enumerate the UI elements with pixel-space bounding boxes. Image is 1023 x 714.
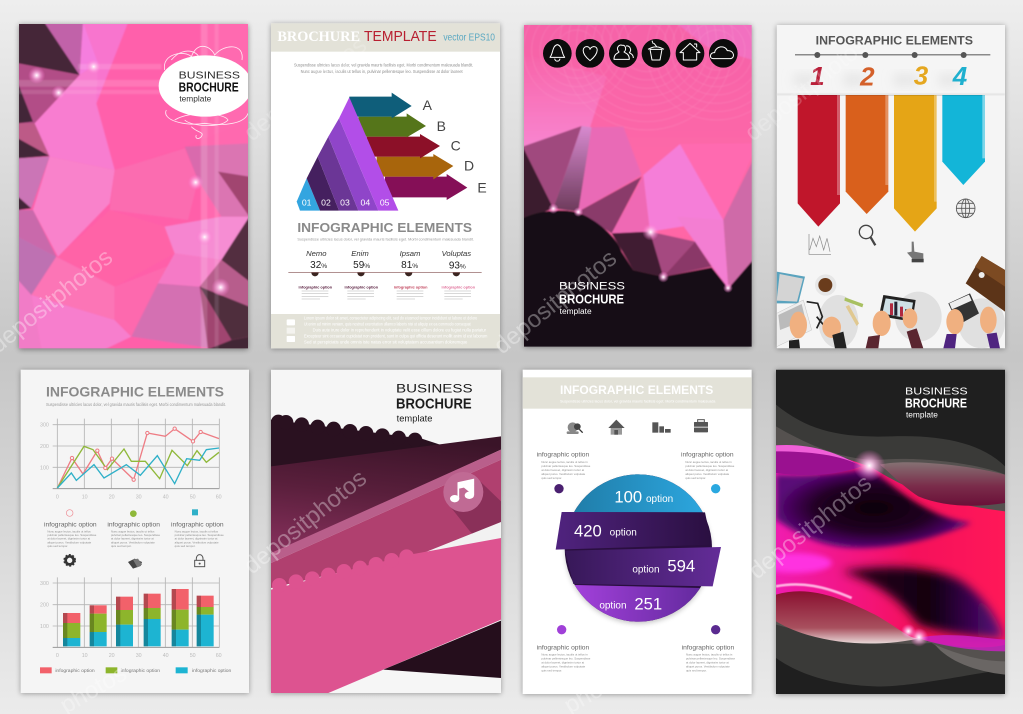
option dots [554,484,720,634]
option text top right: infographic option [681,452,734,459]
icon: magnifier [859,225,875,245]
legend options: Nunc augue lectus, iaculis ut tellus [47,529,91,533]
option text top right: aliquet purus. Vestibulum vulputate [685,472,730,476]
header band [271,23,500,52]
bar chart: 100 [40,624,49,630]
option text bottom left: at dolor laoreet, dignissim tortor at [541,661,584,665]
segmented circle: 420 [574,522,602,541]
watermarks: depositphotos [239,465,372,580]
icon: briefcase [694,420,708,432]
number shadows [797,75,954,85]
title oval: template [179,93,212,103]
option captions [299,285,476,299]
option text bottom right [682,644,735,673]
percentage timeline: 81% [401,260,418,271]
header band: TEMPLATE [364,29,437,45]
percentage timeline: Enim [351,249,369,258]
option text top left: Nunc augue lectus, iaculis ut tellus in [541,460,588,464]
option captions: infographic option [345,285,379,289]
option text top right: at dolor laoreet, dignissim tortor at [685,468,728,472]
percentage timeline: Voluptas [442,249,471,258]
header band: INFOGRAPHIC ELEMENTS [560,383,713,397]
watermarks: depositphotos [740,32,873,147]
heading: Suspendisse ultricies lacus dolor, vel gravida mauris facilisis eget. Morbi condimentum malesuada blandit. [46,402,226,407]
bar chart: 10 [82,653,88,659]
desk illustration [777,256,1005,348]
legend options: infographic option [44,521,97,528]
legend options [44,509,224,548]
option text top right [681,452,735,480]
ribbon numbers: 3 [914,60,929,90]
panel: circular option infographic [523,370,752,695]
heading: INFOGRAPHIC ELEMENTS [46,383,224,399]
line chart: 40 [163,495,169,501]
option text bottom left: pulvinar pellentesque leo. Suspendisse [541,657,591,661]
cover title: BUSINESS [905,387,968,398]
line chart: 30 [136,495,142,501]
ribbons [777,93,1005,232]
legend options: pulvinar pellentesque leo. Suspendisse [175,533,224,537]
header band: vector EPS10 [443,33,495,44]
option text top right: Nunc augue lectus, iaculis ut tellus in [685,460,732,464]
option captions: infographic option [394,285,428,289]
icon: handshake [128,559,142,569]
heading: Suspendisse ultricies lacus dolor, vel gravida mauris facilisis eget. Morbi condimentum malesuada blandit. [297,236,474,241]
icon: line chart [809,234,831,254]
line chart: 10 [82,495,88,501]
intro text [294,62,473,74]
option text top right: pulvinar pellentesque leo. Suspendisse [685,464,735,468]
heading [46,383,226,407]
light glows [548,203,733,293]
legend options: aliquet purus. Vestibulum vulputate [175,540,219,544]
line chart: 200 [40,444,49,450]
scalloped dark band [271,415,440,468]
line chart: 300 [40,423,49,429]
legend options: at dolor laoreet, dignissim tortor at [175,537,218,541]
option text top left [537,452,591,480]
heading [297,221,474,241]
line chart: 50 [190,495,196,501]
percentage timeline: Ipsam [400,249,421,258]
segmented circle: 251 [634,595,662,614]
panel: dark wave brochure cover [758,370,1005,695]
icon: pointing hand [907,242,924,262]
legend options: aliquet purus. Vestibulum vulputate [111,540,155,544]
watermarks: depositphotos [744,470,877,585]
option text top left: infographic option [537,452,590,459]
watermarks: depositphotos [239,32,372,147]
cover title: template [560,306,592,316]
option text top left: aliquet purus. Vestibulum vulputate [541,472,586,476]
legend options: pulvinar pellentesque leo. Suspendisse [47,533,97,537]
light glows [28,59,230,297]
legend options: at dolor laoreet, dignissim tortor at [47,537,90,541]
legend options: aliquet purus. Vestibulum vulputate [47,540,92,544]
segmented circle [556,473,721,623]
long shadow [452,482,501,534]
segmented circle: option [610,528,637,539]
header band: Suspendisse ultricies lacus dolor, vel gravida mauris facilisis eget. Morbi condimentum malesuada [560,399,716,404]
option text top right: quis sed tempor. [685,476,706,480]
panel: flat pink brochure cover [271,370,501,694]
icon row [543,39,738,68]
option text bottom left: infographic option [537,644,590,651]
pyramid: 01 [302,197,312,207]
option text bottom right: aliquet purus. Vestibulum vulputate [686,665,730,669]
pyramid [297,97,398,211]
arrow letters [423,97,487,196]
legend options: Nunc augue lectus, iaculis ut tellus [175,529,219,533]
option text bottom left: quis sed tempor. [541,669,562,673]
legend options: quis sed tempor. [47,544,68,548]
percentage timeline: Nemo [306,249,327,258]
arrow letters: B [437,118,446,134]
bar chart: 60 [216,653,222,659]
panel: ribbon infographic [777,25,1005,349]
footer band: Excepteur sint occaecat cupidatat non proident, sunt in culpa qui officia deserunt mollit anim id est laborum [304,334,488,339]
option text bottom right: at dolor laoreet, dignissim tortor at [686,661,729,665]
option text top left: quis sed tempor. [541,476,562,480]
percentage timeline: 32% [310,260,327,271]
header band [523,377,752,409]
scribble ornament [164,46,248,138]
cover title: BROCHURE [559,292,624,306]
legend options: infographic option [107,521,160,528]
bar chart [40,577,222,659]
option text bottom right: Nunc augue lectus, iaculis ut tellus in [686,653,733,657]
option text bottom left: Nunc augue lectus, iaculis ut tellus in [541,653,588,657]
ribbon numbers: 1 [810,61,825,91]
legend options: at dolor laoreet, dignissim tortor at [111,537,154,541]
option text bottom left: aliquet purus. Vestibulum vulputate [541,665,586,669]
option captions: infographic option [442,285,476,289]
icon: padlock [195,555,205,567]
footer band: Ut enim ad minim veniam, quis nostrud exercitation ullamco laboris nisi ut aliquip ex ea commodo consequat [304,322,471,327]
cover title [396,382,473,423]
intro text: Nunc augue lectus, iaculis ut tellus in, pulvinar pellentesque leo. Suspendisse at dolor laoreet [301,69,463,74]
percentage timeline: 59% [353,260,370,271]
arrow letters: C [451,138,461,154]
legend options: pulvinar pellentesque leo. Suspendisse [111,533,160,537]
cover title: BROCHURE [396,397,472,413]
arrow letters: A [423,97,433,113]
cover title: BUSINESS [396,382,473,396]
line chart: 100 [40,465,49,471]
segmented circle: option [646,494,673,505]
option text bottom right: pulvinar pellentesque leo. Suspendisse [686,657,735,661]
cover title: template [397,413,432,423]
bar legend [40,667,232,674]
legend options: quis sed tempor. [111,544,132,548]
segmented circle: 594 [667,557,695,576]
panel: line and bar charts [21,370,249,694]
option text bottom right: infographic option [682,644,735,651]
line pattern [524,25,752,117]
bar chart: 0 [56,653,59,659]
legend options: quis sed tempor. [175,544,196,548]
header band: BROCHURE [277,29,360,45]
option text bottom right: quis sed tempor. [686,669,707,673]
footer band: Sed ut perspiciatis unde omnis iste natus error sit voluptatem accusantium doloremque [304,339,468,344]
panel: pink and black cover with icons [520,22,755,350]
bar legend: infographic option [121,668,160,674]
icon: people search [567,422,583,434]
icon: bars [652,422,671,433]
line chart: 60 [216,495,222,501]
cover title [905,387,968,420]
line chart: 20 [109,495,115,501]
ribbon numbers: 2 [859,62,875,92]
bar chart: 20 [109,653,115,659]
percentage timeline: 93% [449,261,466,272]
bar chart: 300 [40,581,49,587]
segmented circle: option [599,601,627,612]
arrow letters: E [477,180,487,196]
bar chart: 50 [190,653,196,659]
legend options: Nunc augue lectus, iaculis ut tellus [111,529,155,533]
bar chart: 200 [40,603,49,609]
title oval: BUSINESS [179,71,240,82]
bar chart: 30 [136,653,142,659]
icon: gear [64,555,75,566]
option captions: infographic option [299,285,333,289]
cover title: BROCHURE [905,396,967,410]
title oval: BROCHURE [179,80,239,94]
ribbon numbers [810,66,967,86]
heading: INFOGRAPHIC ELEMENTS [816,33,973,47]
panel: pink polygon brochure cover [18,23,252,350]
panel: pyramid infographic [271,23,500,349]
line chart [40,419,222,501]
option text top left: at dolor laoreet, dignissim tortor at [541,468,584,472]
option text bottom left [537,644,591,673]
icon: house [608,420,625,435]
pyramid: 02 [321,197,331,207]
percentage timeline [288,249,482,276]
legend options: infographic option [171,521,224,528]
arrow letters: D [464,158,474,174]
bar legend: infographic option [192,668,232,674]
icon: globe [956,199,975,218]
ribbon numbers: 4 [952,61,967,91]
pyramid: 03 [340,197,350,207]
light glows [853,450,928,647]
watermarks: depositphotos [489,245,622,360]
segmented circle: 100 [614,488,642,507]
cover title: BUSINESS [559,280,625,292]
footer band: Duis aute irure dolor in reprehenderit in voluptate velit esse cillum dolore eu fugiat nulla pariatur [313,328,487,333]
bar legend: infographic option [55,668,95,674]
title oval [159,55,252,117]
option text top left: pulvinar pellentesque leo. Suspendisse [541,464,591,468]
footer band: Lorem ipsum dolor sit amet, consectetur adipiscing elit, sed do eiusmod tempor incididunt ut labore et dolore [304,316,478,321]
heading: INFOGRAPHIC ELEMENTS [297,221,472,235]
cover title [559,280,625,316]
pyramid: 04 [361,197,370,207]
intro text: Suspendisse ultricies lacus dolor, vel gravida mauris facilisis eget. Morbi condimentum malesuada blandit. [294,62,473,67]
pyramid: 05 [380,197,390,207]
cover title: template [906,410,938,420]
line chart: 0 [56,495,59,501]
timeline [795,52,990,58]
bar chart: 40 [163,653,169,659]
segmented circle: option [632,564,660,575]
arrows A to E [349,93,467,200]
footer band [271,314,500,348]
scalloped pink band [271,538,501,693]
icon: music note [443,472,483,512]
